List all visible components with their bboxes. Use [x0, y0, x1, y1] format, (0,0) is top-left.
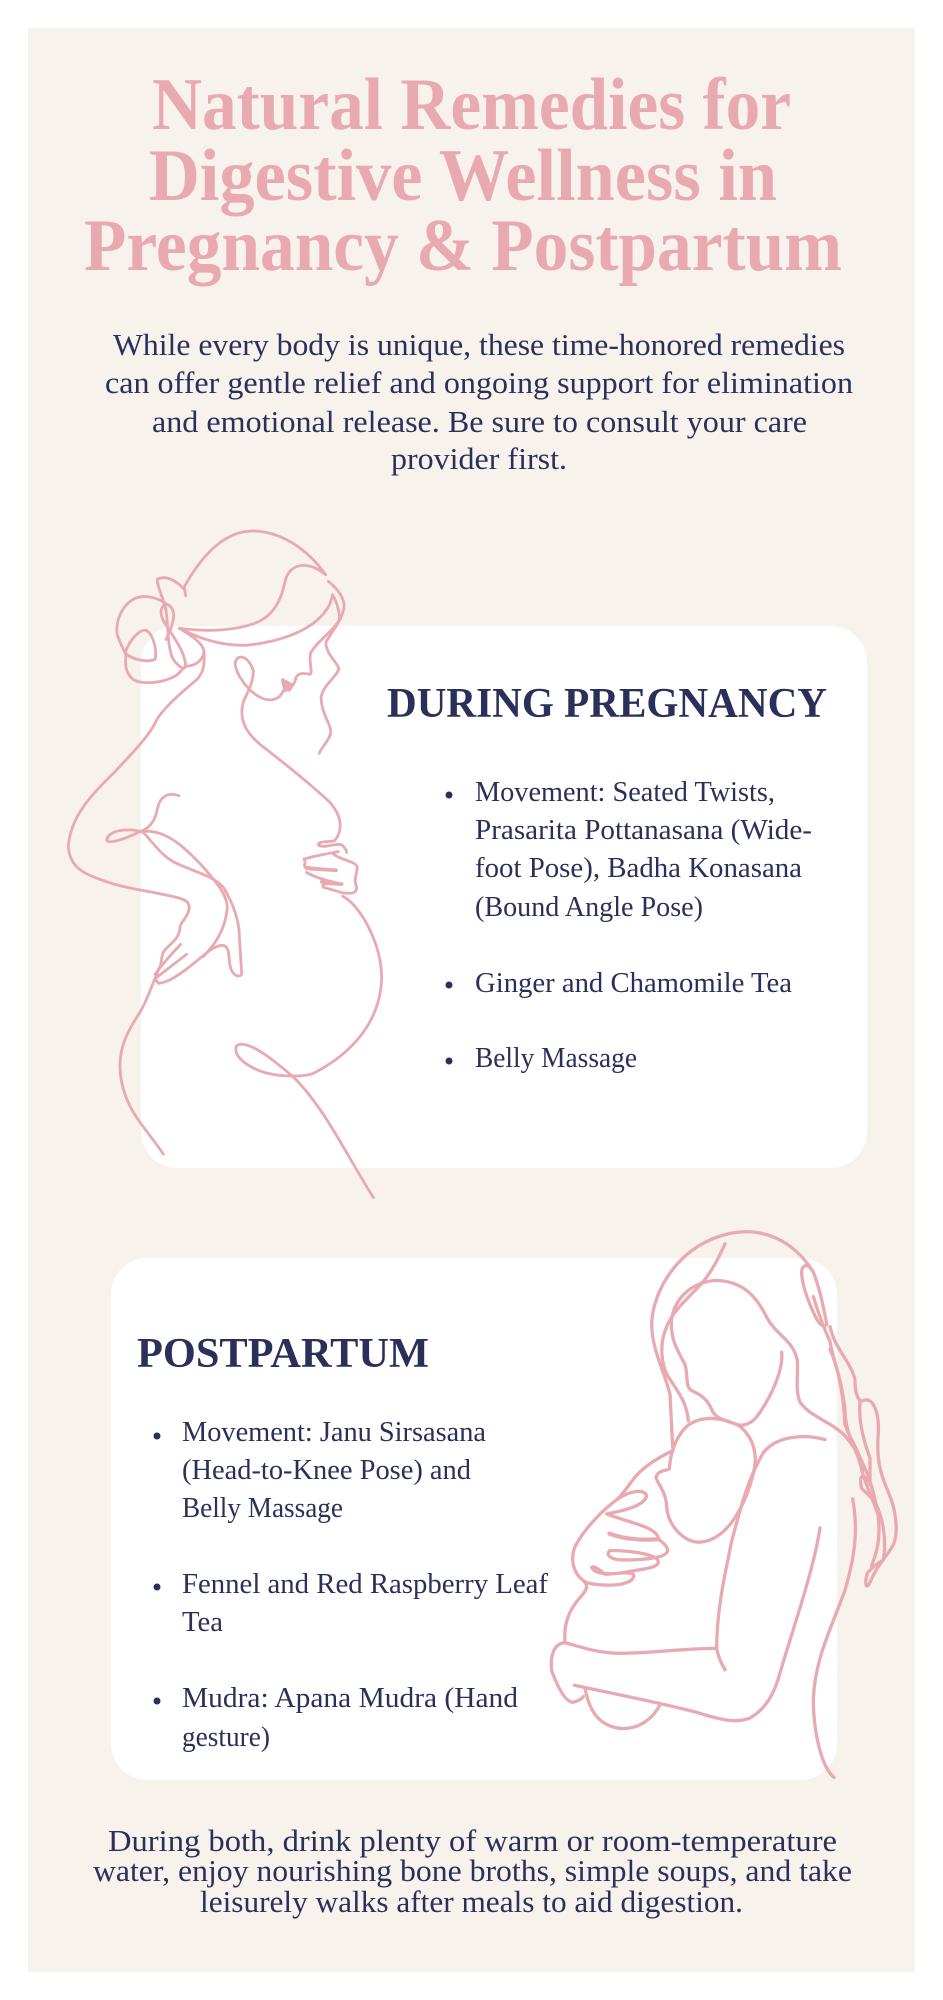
list: pregnancy remedies: Prasarita Pottanasana (Wide- — [475, 815, 812, 846]
list: pregnancy remedies: Ginger and Chamomile Tea — [475, 968, 793, 999]
footer text: water, enjoy nourishing bone broths, simple soups, and take — [93, 1853, 852, 1888]
title: Natural Remedies for — [152, 64, 791, 146]
list: postpartum remedies: Belly Massage — [182, 1493, 343, 1524]
illustration: mother holding baby line art — [551, 1232, 896, 1777]
list: postpartum remedies: Tea — [182, 1607, 224, 1638]
list: pregnancy remedies: (Bound Angle Pose) — [475, 892, 703, 923]
intro text: provider first. — [391, 441, 567, 476]
list: pregnancy remedies: foot Pose), Badha Konasana — [475, 853, 803, 884]
panel: during pregnancy — [68, 531, 867, 1198]
intro text: can offer gentle relief and ongoing support for elimination — [105, 365, 854, 400]
list: postpartum remedies: Mudra: Apana Mudra (Hand — [182, 1683, 518, 1714]
title: Digestive Wellness in — [149, 135, 777, 217]
list: pregnancy remedies: Movement: Seated Twists, — [475, 777, 775, 808]
intro text — [105, 327, 854, 476]
footer text — [93, 1823, 852, 1919]
intro text: and emotional release. Be sure to consult your care — [152, 404, 807, 439]
list: postpartum remedies: gesture) — [182, 1722, 270, 1753]
footer text: During both, drink plenty of warm or room-temperature — [108, 1823, 837, 1858]
heading: postpartum: POSTPARTUM — [137, 1331, 429, 1377]
list: postpartum remedies: Fennel and Red Raspberry Leaf — [182, 1569, 549, 1600]
list: postpartum remedies: (Head-to-Knee Pose) and — [182, 1455, 471, 1486]
card background — [141, 626, 867, 1168]
illustration: pregnant woman line art — [68, 531, 382, 1198]
heading: during pregnancy: DURING PREGNANCY — [387, 681, 827, 727]
title — [84, 64, 842, 287]
list: postpartum remedies: Movement: Janu Sirsasana — [182, 1417, 487, 1448]
footer text: leisurely walks after meals to aid digestion. — [200, 1884, 743, 1919]
title: Pregnancy & Postpartum — [84, 205, 842, 287]
intro text: While every body is unique, these time-honored remedies — [113, 327, 845, 362]
list: pregnancy remedies: Belly Massage — [475, 1043, 637, 1074]
list: postpartum remedies — [154, 1417, 549, 1753]
card background — [111, 1258, 837, 1780]
panel: postpartum — [111, 1232, 896, 1780]
list: pregnancy remedies — [446, 777, 812, 1074]
